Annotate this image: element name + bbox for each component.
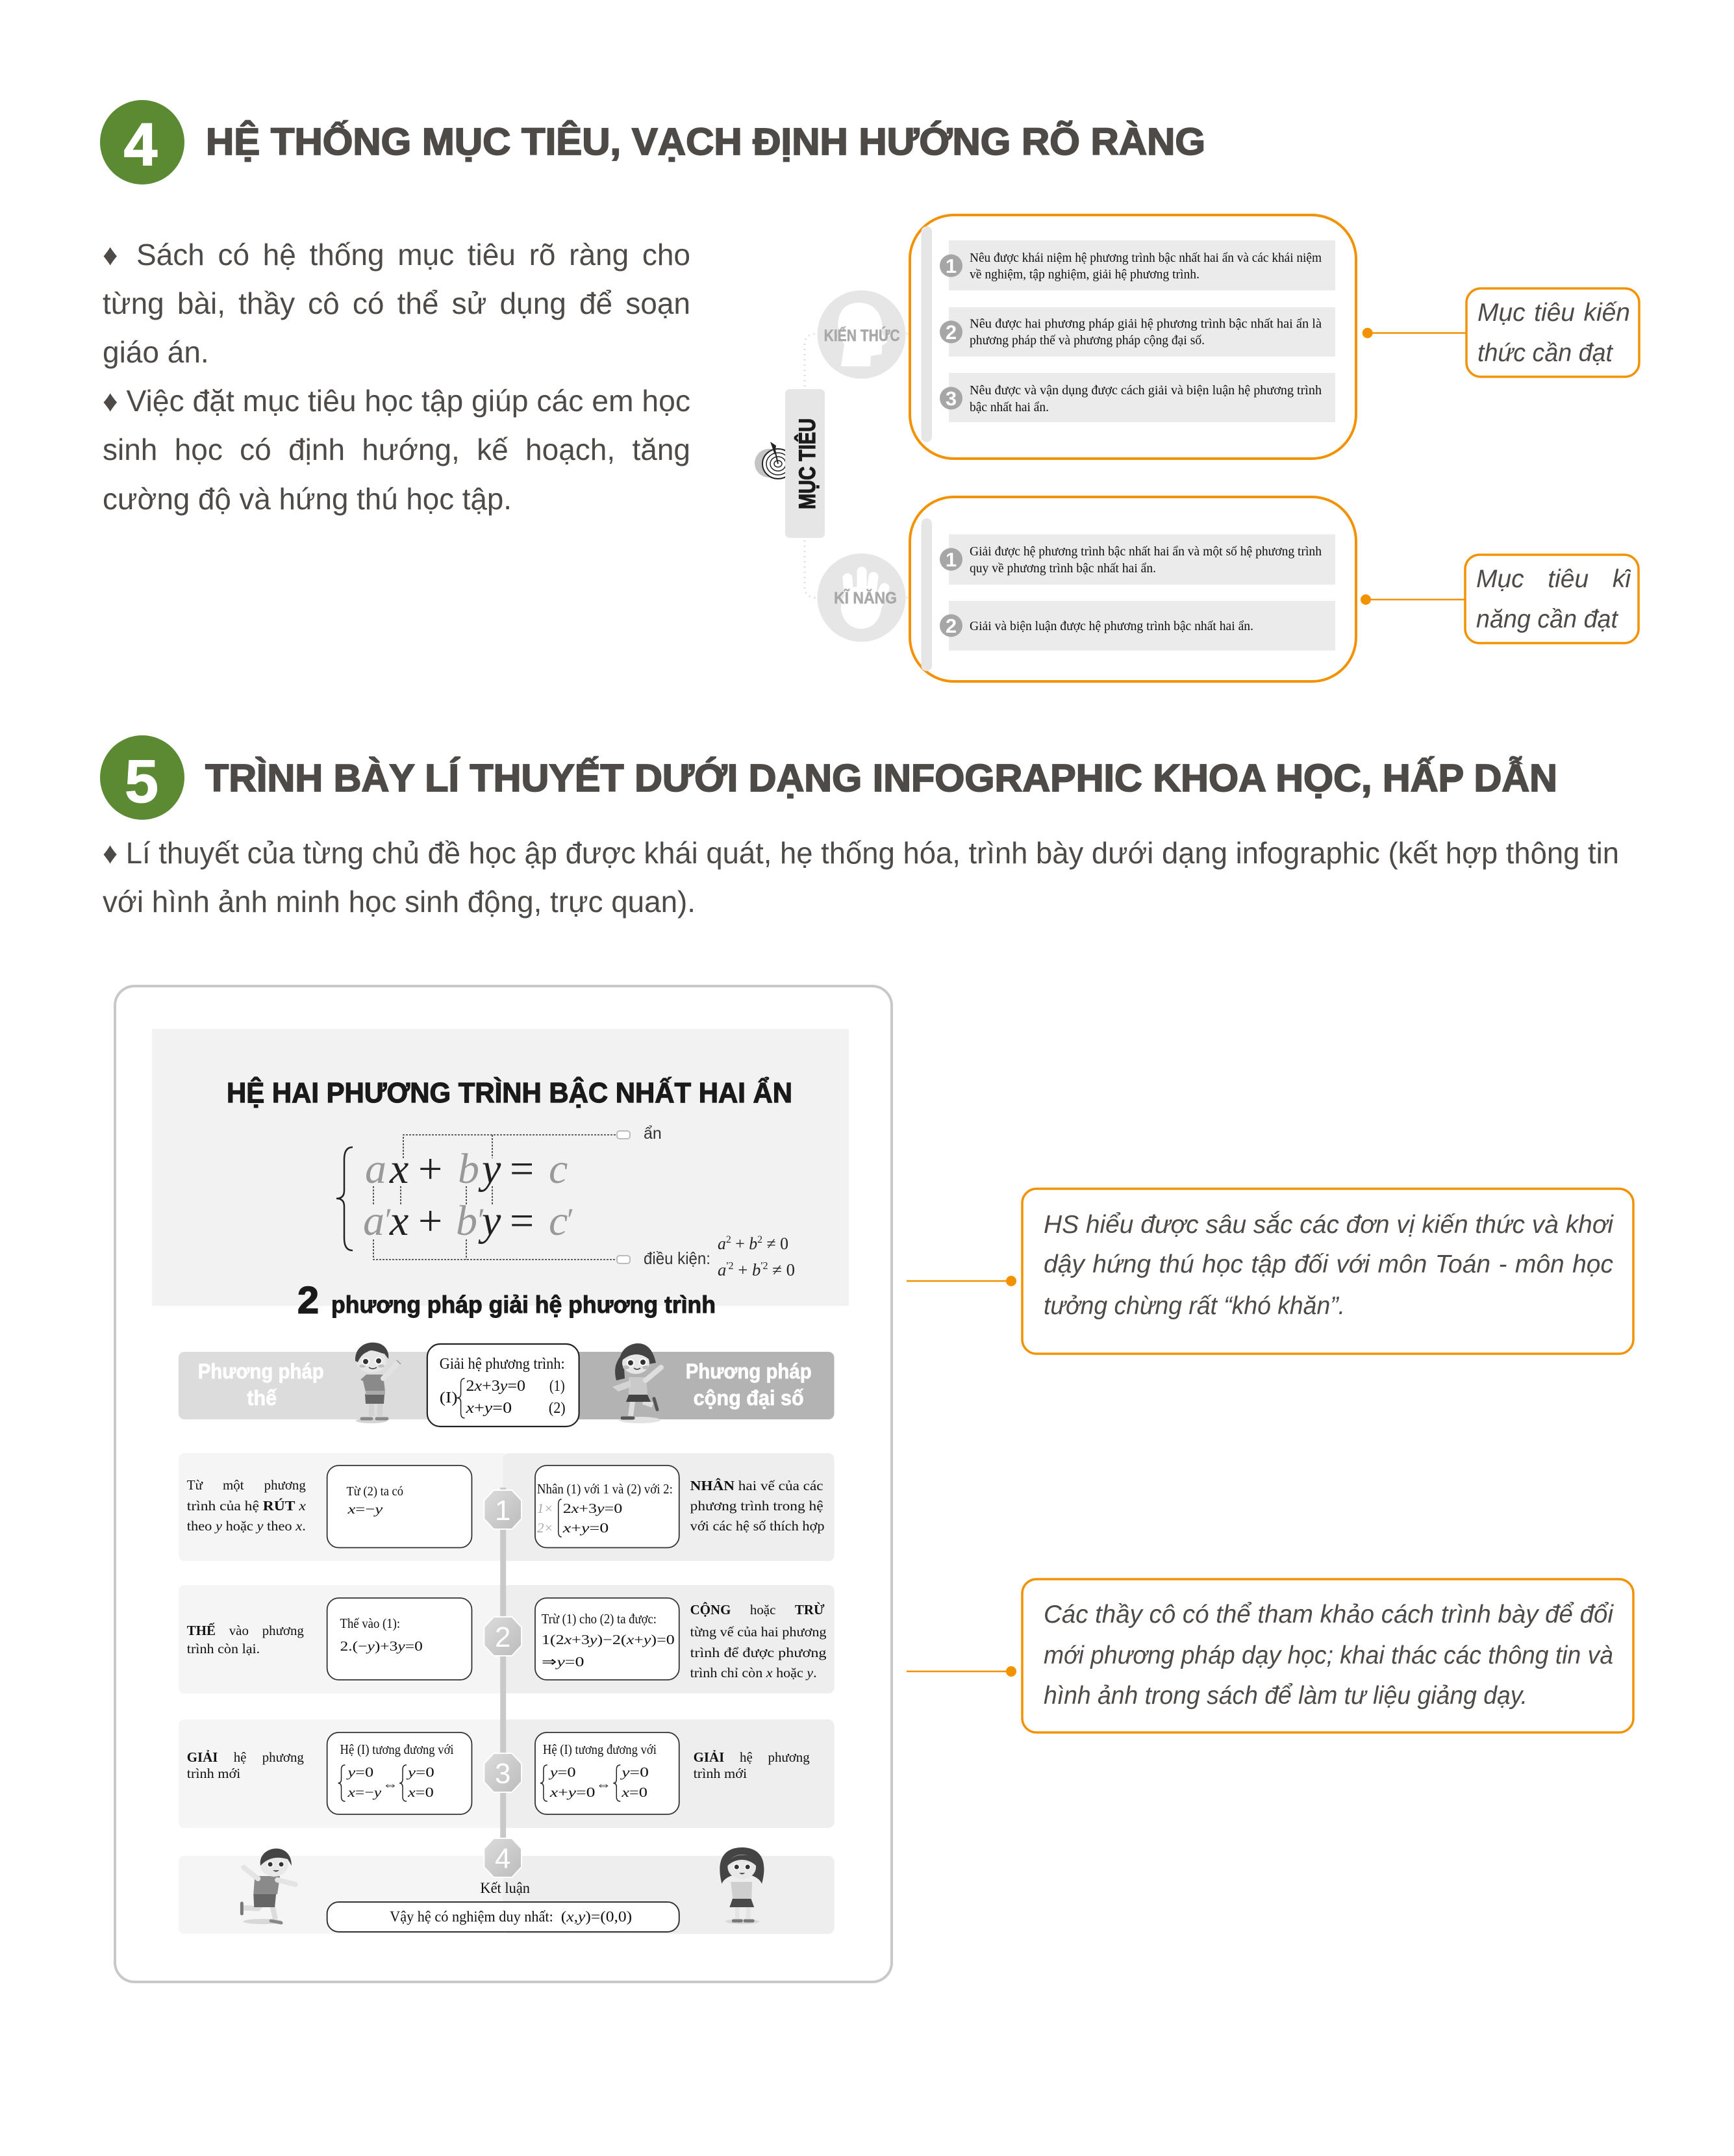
icon: number 5 badge: 5 <box>125 747 158 815</box>
goal 3: 3 <box>946 387 957 410</box>
step 2 right text: từng vế của hai phương <box>690 1624 827 1640</box>
step 2 left box: 2.(− y)+3 y=0 <box>340 1638 423 1654</box>
step 3 left box: Hệ (I) tương đương với <box>340 1742 454 1757</box>
panel: mục tiêu label <box>785 389 825 538</box>
step 2 right box <box>535 1598 679 1680</box>
general equation system: x <box>389 1197 408 1245</box>
conclusion <box>327 1880 679 1932</box>
callout: skill goal note: năng cần đạt <box>1476 605 1619 633</box>
step 3 left box: x=− y <box>347 1784 382 1800</box>
skill 1: 1 <box>946 548 957 571</box>
general equation system: b <box>458 1145 479 1193</box>
conclusion: Vậy hệ có nghiệm duy nhất: <box>390 1909 553 1925</box>
step 3 right text: trình mới <box>694 1766 747 1781</box>
goal 1: về nghiệm, tập nghiệm, giải hệ phương trình. <box>970 268 1200 282</box>
text block: section 5 description <box>103 836 1619 919</box>
skill 2: 2 <box>946 615 957 637</box>
card title: HỆ HAI PHƯƠNG TRÌNH BẬC NHẤT HAI ẨN <box>227 1076 792 1109</box>
step 2 left text <box>187 1623 304 1656</box>
label: điều kiện: điều kiện: <box>644 1249 710 1268</box>
callout: teacher benefit <box>907 1579 1633 1732</box>
skill 1: Giải được hệ phương trình bậc nhất hai ẩn và một số hệ phương trình <box>970 544 1322 559</box>
step 1 left text: theo y hoặc y theo x. <box>187 1518 306 1534</box>
equation box <box>427 1344 579 1427</box>
text block: section 4 description <box>103 236 690 516</box>
callout: knowledge goal note: thức cần đạt <box>1477 339 1614 367</box>
general equation system: c <box>549 1145 568 1193</box>
icon: kĩ năng hand <box>817 553 905 642</box>
text block: section 5 description: với hình ảnh minh học sinh động, trực quan). <box>103 885 696 919</box>
step 1 node: 1 <box>495 1495 510 1527</box>
general equation system: = <box>510 1145 534 1193</box>
step 3 right text: GIẢI hệ phương <box>694 1749 810 1765</box>
conditions: b <box>752 1260 760 1280</box>
illustration: boy waving <box>355 1343 401 1423</box>
method bar: left: thế <box>247 1386 277 1410</box>
illustration: girl waving <box>612 1343 661 1423</box>
timeline bar <box>500 1488 506 1861</box>
goal 3: bậc nhất hai ẩn. <box>970 400 1049 414</box>
method bar: right: Phương pháp <box>686 1360 812 1383</box>
panel: skill goals <box>910 497 1356 681</box>
callout: student benefit: HS hiểu được sâu sắc các đơn vị kiến thức và khơi <box>1044 1211 1614 1239</box>
equation box: 2x+3y=0 <box>466 1378 525 1395</box>
panel: knowledge goals <box>910 215 1356 459</box>
callout: student benefit: dậy hứng thú học tập đối với môn Toán - môn học <box>1044 1250 1613 1278</box>
section 5 heading <box>100 735 1557 820</box>
conditions: + <box>731 1234 749 1253</box>
conditions: + <box>734 1260 752 1280</box>
step 3 right box: ⇔ <box>596 1777 611 1792</box>
step 3 right box: x+y=0 <box>549 1784 595 1800</box>
illustration: girl standing <box>720 1847 764 1924</box>
goal 3: Nêu được và vận dụng được cách giải và biện luận hệ phương trình <box>970 383 1322 398</box>
step 3 right box: Hệ (I) tương đương với <box>543 1742 657 1757</box>
step 2 right box: ⇒ y=0 <box>542 1654 584 1669</box>
step 3 right text <box>694 1749 810 1781</box>
step 1 left text <box>187 1477 307 1534</box>
step 3 node <box>484 1753 521 1792</box>
general equation system: = <box>510 1197 534 1245</box>
callout: teacher benefit: hình ảnh trong sách để làm tư liệu giảng dạy. <box>1044 1682 1527 1710</box>
step 3 right box: x=0 <box>621 1784 647 1800</box>
goal 2: Nêu được hai phương pháp giải hệ phương trình bậc nhất hai ẩn là <box>970 317 1322 331</box>
text block: section 4 description: từng bài, thầy cô có thể sử dụng để soạn <box>103 286 690 320</box>
connectors <box>805 334 921 598</box>
conclusion: (x,y)=(0,0) <box>561 1909 632 1925</box>
general equation system <box>336 1145 573 1250</box>
panel: mục tiêu label: MỤC TIÊU <box>794 418 820 509</box>
step 1 left box: Từ (2) ta có <box>346 1484 403 1499</box>
goal 2: phương pháp thế và phương pháp cộng đại số. <box>970 333 1205 348</box>
step 1 right box: x+y=0 <box>562 1520 609 1536</box>
step 2 right text: trình để được phương <box>690 1645 827 1660</box>
text block: section 4 description: giáo án. <box>103 335 209 369</box>
step 1 right box: 2x+3 y=0 <box>563 1501 622 1516</box>
callout: teacher benefit: Các thầy cô có thể tham khảo cách trình bày để đổi <box>1044 1601 1614 1629</box>
step 3 left box: ⇔ <box>383 1777 398 1792</box>
method bar: right <box>570 1352 834 1419</box>
step 2 left text: THẾ vào phương <box>187 1623 304 1638</box>
step 4 node: 4 <box>495 1843 510 1875</box>
goal 1 <box>940 240 1335 290</box>
step 1 right text: với các hệ số thích hợp <box>690 1518 825 1534</box>
callout: knowledge goal note <box>1363 288 1639 377</box>
heading text 5: TRÌNH BÀY LÍ THUYẾT DƯỚI DẠNG INFOGRAPHIC KHOA HỌC, HẤP DẪN <box>205 756 1557 800</box>
goal 2 <box>940 307 1335 357</box>
method bar: right: cộng đại số <box>694 1386 804 1410</box>
step 3 right box: y=0 <box>620 1764 649 1780</box>
general equation system: a <box>365 1145 386 1193</box>
dotted guide lines <box>373 1135 617 1260</box>
conditions: ≠ 0 <box>762 1234 788 1253</box>
general equation system: ′ <box>565 1201 573 1237</box>
panel: sample infographic card <box>115 986 892 1982</box>
step 1 left box <box>327 1465 471 1547</box>
icon: number 4 badge: 4 <box>124 112 157 178</box>
equation box: (2) <box>549 1400 566 1417</box>
subheading: phương pháp giải hệ phương trình <box>331 1291 716 1318</box>
step 3 left text: GIẢI hệ phương <box>187 1749 304 1765</box>
step 1 right box: 2× <box>537 1520 553 1536</box>
step 1 right box: Nhân (1) với 1 và (2) với 2: <box>537 1481 673 1497</box>
conditions: '2 <box>760 1260 768 1272</box>
conditions: ≠ 0 <box>768 1260 795 1280</box>
icon: kiến thức head <box>817 290 905 379</box>
icon: number 5 badge <box>100 735 184 820</box>
step 1 node <box>484 1490 521 1529</box>
step 3 right box <box>535 1732 679 1814</box>
callout: student benefit <box>907 1189 1633 1354</box>
conditions <box>718 1234 795 1280</box>
callout: knowledge goal note: Mục tiêu kiến <box>1477 299 1630 327</box>
skill 1: quy về phương trình bậc nhất hai ẩn. <box>970 561 1156 576</box>
callout: teacher benefit: mới phương pháp dạy học; khai thác các thông tin và <box>1044 1642 1613 1669</box>
methods comparison block <box>179 1344 834 1934</box>
skill 2: Giải và biện luận được hệ phương trình bậc nhất hai ẩn. <box>970 619 1253 633</box>
step 1 left box: x=− y <box>347 1501 383 1517</box>
general equation system: b <box>456 1197 477 1245</box>
step 2 right box: 1(2 x+3 y)−2( x+y)=0 <box>542 1632 675 1647</box>
conditions: 2 <box>757 1234 762 1245</box>
step 2 right text <box>690 1602 827 1680</box>
step 2 node: 2 <box>495 1621 510 1653</box>
general equation system: y <box>478 1145 501 1193</box>
step 3 left box: y=0 <box>346 1764 373 1780</box>
icon: kiến thức head: KIẾN THỨC <box>824 325 900 345</box>
icon: pointing hand bottom <box>617 1256 630 1263</box>
step 3 right box: y=0 <box>548 1764 576 1780</box>
text block: section 5 description: ♦ Lí thuyết của từng chủ đề học ập được khái quát, hẹ thống hóa, trình bày dưới dạng infographic (kết hợp thông tin <box>103 836 1619 870</box>
general equation system: ′ <box>383 1201 391 1237</box>
equation box: (I) <box>440 1389 458 1406</box>
conditions: b <box>749 1234 757 1253</box>
icon: number 4 badge <box>100 100 184 184</box>
method bar: left <box>179 1352 437 1419</box>
diagram: mục tiêu mind map <box>755 215 1356 681</box>
step 3 left box: y=0 <box>406 1764 434 1780</box>
formula panel background <box>152 1029 849 1306</box>
general equation system: ′ <box>476 1201 484 1237</box>
step 1 right text: phương trình trong hệ <box>690 1498 823 1514</box>
text block: section 4 description: cường độ và hứng thú học tập. <box>103 482 512 516</box>
skill 1 <box>940 534 1335 585</box>
goal 3 <box>940 373 1335 422</box>
subheading <box>297 1280 716 1321</box>
illustration: boy running <box>242 1849 295 1924</box>
step 1 right text <box>690 1478 825 1534</box>
step 1 right box <box>535 1465 679 1547</box>
conditions: a <box>718 1234 726 1253</box>
callout: student benefit: tưởng chừng rất “khó khăn”. <box>1044 1292 1345 1320</box>
step 1 left text: trình của hệ RÚT x <box>187 1498 307 1514</box>
text block: section 4 description: sinh học có định hướng, kế hoạch, tăng <box>103 433 690 466</box>
subheading: 2 <box>297 1280 319 1321</box>
general equation system: c <box>549 1197 568 1245</box>
general equation system: + <box>418 1197 442 1245</box>
method bar: left: Phương pháp <box>198 1360 324 1383</box>
step 2 right box: Trừ (1) cho (2) ta được: <box>542 1611 657 1627</box>
heading text 4: HỆ THỐNG MỤC TIÊU, VẠCH ĐỊNH HƯỚNG RÕ RÀNG <box>206 121 1205 163</box>
general equation system: y <box>478 1197 501 1245</box>
equation box: (1) <box>549 1378 565 1395</box>
general equation system: x <box>389 1145 408 1193</box>
step 3 left box <box>327 1732 471 1814</box>
conclusion: Kết luận <box>480 1880 531 1896</box>
icon: target <box>755 442 794 479</box>
conditions: 2 <box>726 1234 731 1245</box>
step 2 node <box>484 1617 521 1656</box>
step 2 left text: trình còn lại. <box>187 1641 260 1656</box>
goal 1: Nêu được khái niệm hệ phương trình bậc nhất hai ẩn và các khái niệm <box>970 251 1322 265</box>
icon: kĩ năng hand: KĨ NĂNG <box>834 588 897 607</box>
goal 2: 2 <box>946 321 957 344</box>
equation box: x+y=0 <box>465 1400 512 1417</box>
text block: section 4 description: ♦ Việc đặt mục tiêu học tập giúp các em học <box>103 384 690 418</box>
goal 1: 1 <box>946 255 957 277</box>
step 1 right text: NHÂN hai vế của các <box>690 1478 823 1493</box>
callout: skill goal note: Mục tiêu kĩ <box>1476 565 1631 593</box>
step 2 right text: trình chỉ còn x hoặc y. <box>690 1665 817 1680</box>
step 4 node <box>484 1838 521 1877</box>
step 2 left box <box>327 1598 471 1680</box>
step 2 right text: CỘNG hoặc TRỪ <box>690 1602 825 1617</box>
conditions: a <box>718 1260 726 1280</box>
conditions: '2 <box>726 1260 734 1272</box>
step 3 left box: x=0 <box>407 1784 434 1800</box>
step rows backgrounds <box>179 1453 834 1934</box>
step 2 left box: Thế vào (1): <box>340 1616 400 1631</box>
label: ẩn: ẩn <box>644 1124 662 1143</box>
skill 2 <box>940 601 1335 651</box>
step 3 left text: trình mới <box>187 1766 241 1781</box>
general equation system: + <box>418 1145 442 1193</box>
general equation system: a <box>363 1197 384 1245</box>
step 3 left text <box>187 1749 304 1781</box>
equation box: Giải hệ phương trình: <box>440 1356 565 1373</box>
step 3 node: 3 <box>495 1758 510 1790</box>
step 1 right box: 1× <box>537 1501 553 1516</box>
icon: pointing hand top <box>617 1131 630 1139</box>
callout: skill goal note <box>1361 555 1639 643</box>
step 1 left text: Từ một phương <box>187 1477 306 1493</box>
section 4 heading <box>100 100 1205 184</box>
text block: section 4 description: ♦ Sách có hệ thống mục tiêu rõ ràng cho <box>103 238 690 272</box>
